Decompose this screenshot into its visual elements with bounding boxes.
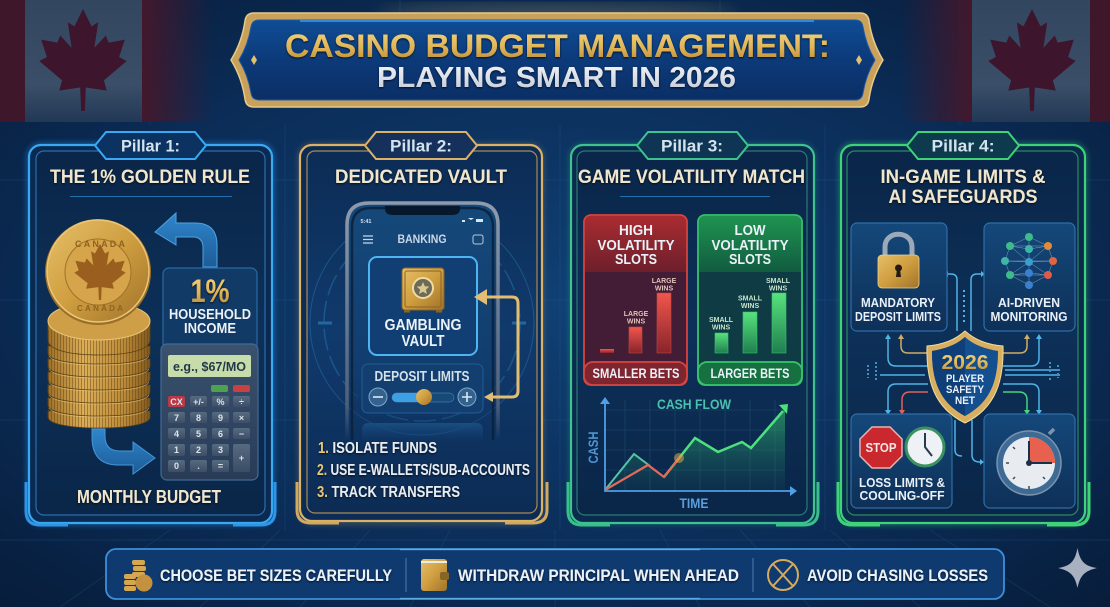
bar chart: high volatility: WINS bbox=[655, 286, 673, 292]
tip: choose bet sizes carefully: CHOOSE BET SIZES CAREFULLY bbox=[160, 566, 393, 585]
tab: pillar 3: Pillar 3: bbox=[661, 136, 723, 156]
icon: clock bbox=[906, 428, 944, 466]
label: larger bets bbox=[698, 362, 802, 385]
panel: pillar 1 bbox=[26, 132, 275, 525]
tab: pillar 2: Pillar 2: bbox=[390, 136, 452, 156]
icon: padlock bbox=[878, 234, 919, 288]
icon: stop sign: STOP bbox=[866, 440, 897, 455]
bar chart: low volatility: WINS bbox=[712, 324, 730, 332]
callout: 1% household income bbox=[163, 268, 257, 350]
tab: pillar 2 bbox=[365, 132, 477, 159]
list: vault steps: 3. TRACK TRANSFERS bbox=[317, 484, 460, 501]
card: mandatory deposit limits: MANDATORY bbox=[861, 295, 935, 310]
icon: calculator: 5 bbox=[196, 429, 201, 439]
icon: calculator: 2 bbox=[196, 445, 201, 455]
bar chart: low volatility: WINS bbox=[769, 286, 787, 292]
icon: no chasing bbox=[768, 560, 798, 590]
icon: gold coin stack bbox=[45, 219, 151, 428]
list: vault steps: 2. USE E-WALLETS/SUB-ACCOUNTS bbox=[317, 462, 530, 479]
card: ai-driven monitoring: AI-DRIVEN bbox=[998, 295, 1060, 310]
icon: calculator: 7 bbox=[174, 413, 179, 423]
icon: phone: BANKING bbox=[398, 234, 447, 246]
line chart: cash flow: CASH bbox=[585, 432, 601, 464]
bar chart: low volatility: SMALL bbox=[709, 317, 734, 324]
bar chart: low volatility: SMALL bbox=[766, 278, 791, 285]
heading: in-game limits and ai safeguards: AI SAFEGUARDS bbox=[888, 187, 1038, 208]
card: high volatility slots: SLOTS bbox=[615, 252, 657, 268]
icon: gold connector arrow bbox=[474, 289, 518, 402]
card: deposit limits slider: DEPOSIT LIMITS bbox=[374, 369, 470, 385]
icon: calculator: 9 bbox=[218, 413, 223, 423]
card: deposit limits slider bbox=[362, 364, 483, 413]
left Canadian flag bbox=[0, 0, 214, 122]
icon: gold coin stack: CANADA bbox=[77, 304, 123, 313]
icon: calculator: = bbox=[218, 461, 223, 471]
heading: dedicated vault: DEDICATED VAULT bbox=[335, 167, 507, 188]
icon: 2026 player safety net shield: SAFETY bbox=[946, 384, 985, 396]
card: mandatory deposit limits bbox=[851, 223, 947, 331]
card: ai-driven monitoring: MONITORING bbox=[990, 309, 1068, 324]
line chart: cash flow: CASH FLOW bbox=[657, 396, 732, 412]
icon: sparkle watermark bbox=[1058, 548, 1097, 588]
card: stopwatch bbox=[984, 414, 1075, 508]
icon: calculator: + bbox=[239, 453, 244, 463]
tab: pillar 4: Pillar 4: bbox=[932, 136, 994, 156]
bar chart: high volatility bbox=[600, 278, 677, 353]
icon: calculator: ÷ bbox=[239, 397, 244, 407]
bar chart: high volatility: LARGE bbox=[624, 311, 649, 318]
bar chart: high volatility: LARGE bbox=[652, 278, 677, 285]
icon: calculator: 1 bbox=[174, 445, 179, 455]
title line 1: CASINO BUDGET MANAGEMENT: bbox=[285, 28, 830, 64]
icon: phone: 5:41 bbox=[360, 219, 372, 225]
icon: 2026 player safety net shield: PLAYER bbox=[946, 373, 984, 385]
card: high volatility slots: VOLATILITY bbox=[598, 238, 675, 254]
heading: the 1% golden rule: THE 1% GOLDEN RULE bbox=[50, 167, 250, 188]
icon: calculator: 6 bbox=[218, 429, 223, 439]
list: vault steps: 1. ISOLATE FUNDS bbox=[318, 440, 437, 457]
card: loss limits and cooling-off: COOLING-OFF bbox=[860, 488, 945, 503]
panel: pillar 3 bbox=[568, 132, 818, 525]
card: low volatility slots: LOW bbox=[734, 223, 766, 239]
icon: calculator: 3 bbox=[218, 445, 223, 455]
bottom tips bar bbox=[106, 549, 1004, 599]
icon: coins bbox=[124, 560, 152, 592]
label: smaller bets bbox=[584, 362, 687, 385]
tip: avoid chasing losses: AVOID CHASING LOSSES bbox=[807, 566, 988, 585]
tab: pillar 4 bbox=[907, 132, 1019, 159]
circuit connectors bbox=[868, 274, 1060, 462]
callout: 1% household income: 1% bbox=[190, 273, 230, 309]
icon: neural network bbox=[1001, 233, 1057, 289]
icon: wallet bbox=[421, 559, 449, 591]
bar chart: high volatility: WINS bbox=[627, 318, 645, 326]
icon: calculator: e.g., $67/MO bbox=[173, 359, 246, 374]
card: low volatility slots: SLOTS bbox=[729, 252, 771, 268]
list: vault steps bbox=[317, 440, 530, 501]
callout: 1% household income: INCOME bbox=[184, 321, 236, 337]
card: gambling vault: VAULT bbox=[402, 333, 445, 350]
heading: in-game limits and ai safeguards bbox=[880, 167, 1046, 208]
card: ai-driven monitoring bbox=[984, 223, 1075, 331]
callout: 1% household income: HOUSEHOLD bbox=[169, 307, 251, 323]
icon: calculator bbox=[161, 344, 258, 480]
icon: gold coin stack: CANADA bbox=[75, 239, 126, 249]
icon: calculator: × bbox=[239, 413, 244, 423]
icon: 2026 player safety net shield: NET bbox=[955, 395, 975, 407]
tab: pillar 1: Pillar 1: bbox=[121, 136, 180, 156]
right Canadian flag bbox=[900, 0, 1110, 122]
decoration: radial rings behind phone bbox=[310, 211, 534, 435]
panel: pillar 2 bbox=[297, 132, 547, 523]
label: larger bets: LARGER BETS bbox=[710, 366, 790, 381]
card: low volatility slots: VOLATILITY bbox=[712, 238, 789, 254]
line chart: cash flow bbox=[585, 396, 797, 511]
icon: calculator: . bbox=[197, 461, 200, 471]
icon: stopwatch bbox=[997, 429, 1061, 495]
icon: 2026 player safety net shield: 2026 bbox=[942, 352, 988, 374]
card: high volatility slots bbox=[584, 215, 687, 385]
card: mandatory deposit limits: DEPOSIT LIMITS bbox=[855, 309, 941, 324]
card: gambling vault: GAMBLING bbox=[384, 317, 462, 334]
card: loss limits and cooling-off: LOSS LIMITS & bbox=[859, 475, 945, 490]
title line 2: PLAYING SMART IN 2026 bbox=[377, 62, 736, 94]
heading: game volatility match: GAME VOLATILITY MATCH bbox=[578, 167, 805, 188]
icon: calculator: % bbox=[216, 397, 225, 407]
label: monthly budget: MONTHLY BUDGET bbox=[77, 487, 221, 507]
card: loss limits and cooling-off bbox=[851, 414, 952, 508]
icon: calculator: 0 bbox=[174, 461, 179, 471]
card: high volatility slots: HIGH bbox=[619, 223, 653, 239]
card: low volatility slots bbox=[698, 215, 802, 385]
icon: calculator: 4 bbox=[174, 429, 179, 439]
icon: calculator: 8 bbox=[196, 413, 201, 423]
line chart: cash flow: TIME bbox=[680, 496, 708, 511]
icon: 2026 player safety net shield bbox=[927, 331, 1003, 423]
bar chart: low volatility bbox=[709, 278, 791, 353]
icon: arrow down to calculator bbox=[92, 429, 155, 474]
tab: pillar 3 bbox=[637, 132, 748, 159]
label: smaller bets: SMALLER BETS bbox=[592, 366, 680, 381]
icon: calculator: +/- bbox=[193, 397, 204, 407]
card: gambling vault bbox=[369, 257, 477, 355]
bar chart: low volatility: SMALL bbox=[738, 296, 763, 302]
bar chart: low volatility: WINS bbox=[741, 303, 759, 310]
icon: phone bbox=[347, 203, 498, 443]
icon: arrow up to coin bbox=[155, 213, 217, 267]
title banner bbox=[231, 6, 883, 107]
tip: withdraw principal when ahead: WITHDRAW PRINCIPAL WHEN AHEAD bbox=[458, 566, 739, 585]
tab: pillar 1 bbox=[95, 132, 206, 159]
icon: calculator: − bbox=[239, 429, 244, 439]
panel: pillar 4 bbox=[838, 132, 1089, 525]
heading: in-game limits and ai safeguards: IN-GAME LIMITS & bbox=[880, 167, 1046, 188]
icon: calculator: CX bbox=[170, 397, 183, 407]
